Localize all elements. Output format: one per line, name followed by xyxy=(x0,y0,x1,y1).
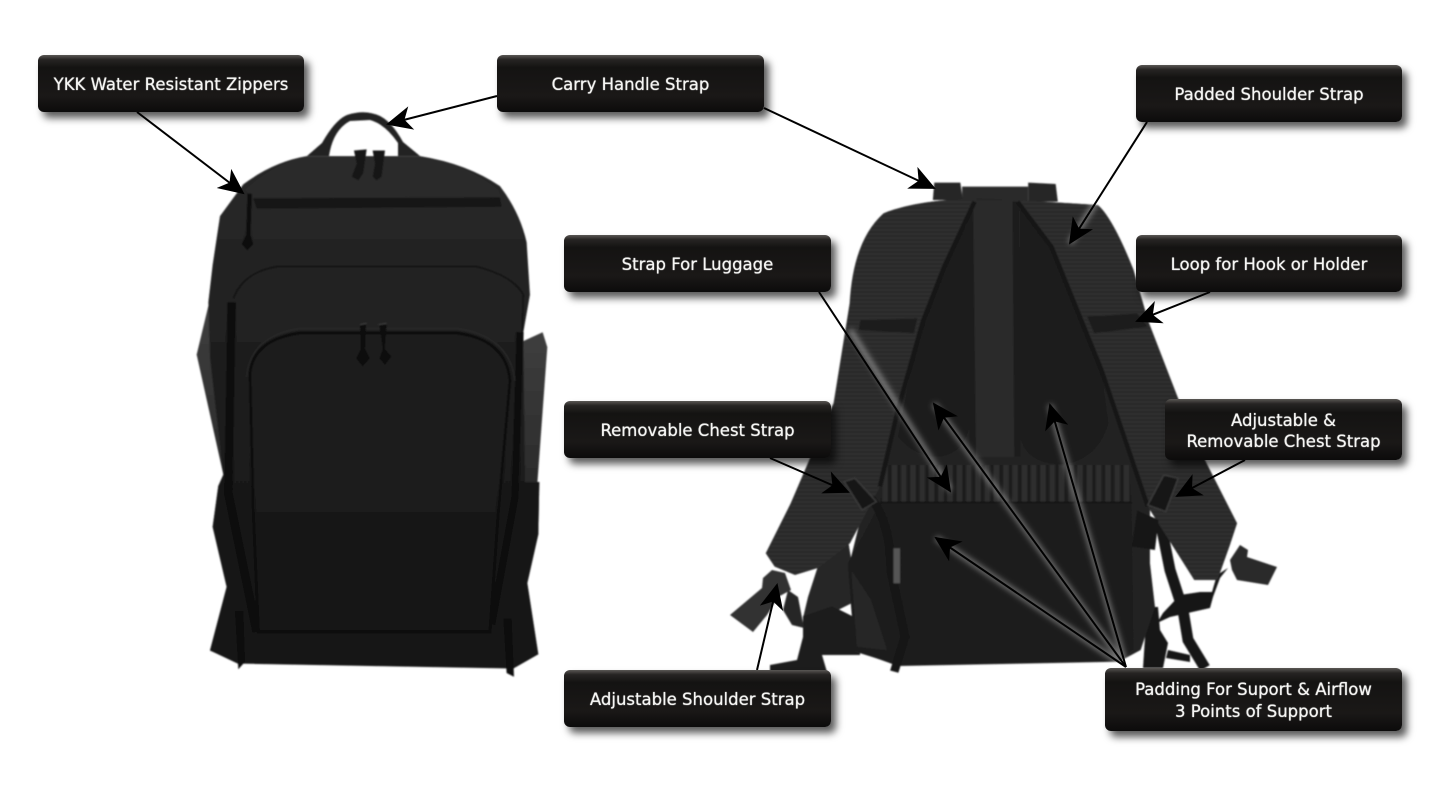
label: padding for support and airflow xyxy=(1105,668,1402,731)
spine panel xyxy=(969,200,1017,457)
label: padded shoulder strap xyxy=(1136,65,1402,122)
top flap and zipper xyxy=(245,157,502,198)
right shoulder strap xyxy=(1016,200,1237,580)
middle pocket seam xyxy=(233,267,523,474)
lower left hanging straps xyxy=(803,540,858,618)
icon: back view backpack photo xyxy=(730,183,1277,672)
right grey side panel xyxy=(518,332,547,486)
carry handle xyxy=(307,112,420,156)
label: padding for support and airflow: Padding For Suport & Airflow xyxy=(1135,680,1372,698)
arrow: carry handle back xyxy=(764,108,934,188)
top zipper pulls xyxy=(352,149,385,181)
lower side shade xyxy=(210,486,258,665)
lower left side pocket xyxy=(851,570,887,650)
label: YKK water resistant zippers: YKK Water Resistant Zippers xyxy=(54,75,288,94)
arrow: carry handle front xyxy=(388,96,497,124)
label: adjustable and removable chest strap: Adjustable & xyxy=(1231,410,1336,430)
arrow: adjustable chest strap xyxy=(1177,460,1245,496)
label: strap for luggage xyxy=(564,235,831,292)
left grey side panel xyxy=(197,304,235,474)
bag body xyxy=(208,156,539,668)
label: removable chest strap: Removable Chest Strap xyxy=(600,421,795,440)
main bag back xyxy=(848,198,1180,665)
left hanging tab xyxy=(783,590,804,628)
label: strap for luggage: Strap For Luggage xyxy=(622,255,773,274)
label: adjustable shoulder strap: Adjustable Shoulder Strap xyxy=(590,690,805,709)
label: carry handle strap: Carry Handle Strap xyxy=(552,75,709,94)
label: adjustable shoulder strap xyxy=(564,670,831,727)
right shoulder adjuster strap xyxy=(1230,545,1277,585)
lower mesh panel xyxy=(848,503,1134,650)
label: loop for hook or holder: Loop for Hook or Holder xyxy=(1171,255,1367,274)
left shoulder adjuster strap xyxy=(730,570,791,632)
waist band xyxy=(880,465,1132,503)
side zipper pull xyxy=(242,194,253,251)
arrow: removable chest strap xyxy=(770,458,848,492)
arrow: padding right upper xyxy=(1050,405,1126,667)
label: padded shoulder strap: Padded Shoulder Strap xyxy=(1174,85,1364,104)
left chest strap and buckle xyxy=(871,498,905,672)
label: adjustable and removable chest strap xyxy=(1165,399,1402,460)
right upper mesh pad xyxy=(1020,208,1109,465)
arrow: adjustable shoulder strap xyxy=(757,585,777,670)
label: adjustable and removable chest strap: Removable Chest Strap xyxy=(1186,432,1381,450)
label: removable chest strap xyxy=(564,401,831,458)
icon: front view backpack photo xyxy=(197,112,547,677)
arrow: YKK zippers xyxy=(137,112,243,193)
arrow glow on back view xyxy=(850,122,1147,667)
arrow: padded shoulder strap xyxy=(1070,122,1147,243)
label: padding for support and airflow: 3 Points of Support xyxy=(1175,702,1332,720)
label: carry handle strap xyxy=(497,55,764,112)
label: YKK water resistant zippers xyxy=(38,55,304,112)
arrow: strap for luggage xyxy=(819,292,950,491)
arrow: loop for hook xyxy=(1137,292,1210,321)
pocket zipper pulls xyxy=(356,325,392,367)
arrow: padding left upper xyxy=(934,404,1126,667)
left shoulder strap xyxy=(766,198,976,575)
left upper mesh pad xyxy=(898,227,969,457)
top handle tabs xyxy=(933,183,1058,202)
bottom zippers xyxy=(235,611,514,677)
lower right hanging straps xyxy=(1157,568,1228,623)
front pocket xyxy=(250,333,510,632)
right chest strap and buckle xyxy=(1148,475,1178,512)
label: loop for hook or holder xyxy=(1136,235,1402,292)
arrow: padding lower xyxy=(936,538,1126,667)
